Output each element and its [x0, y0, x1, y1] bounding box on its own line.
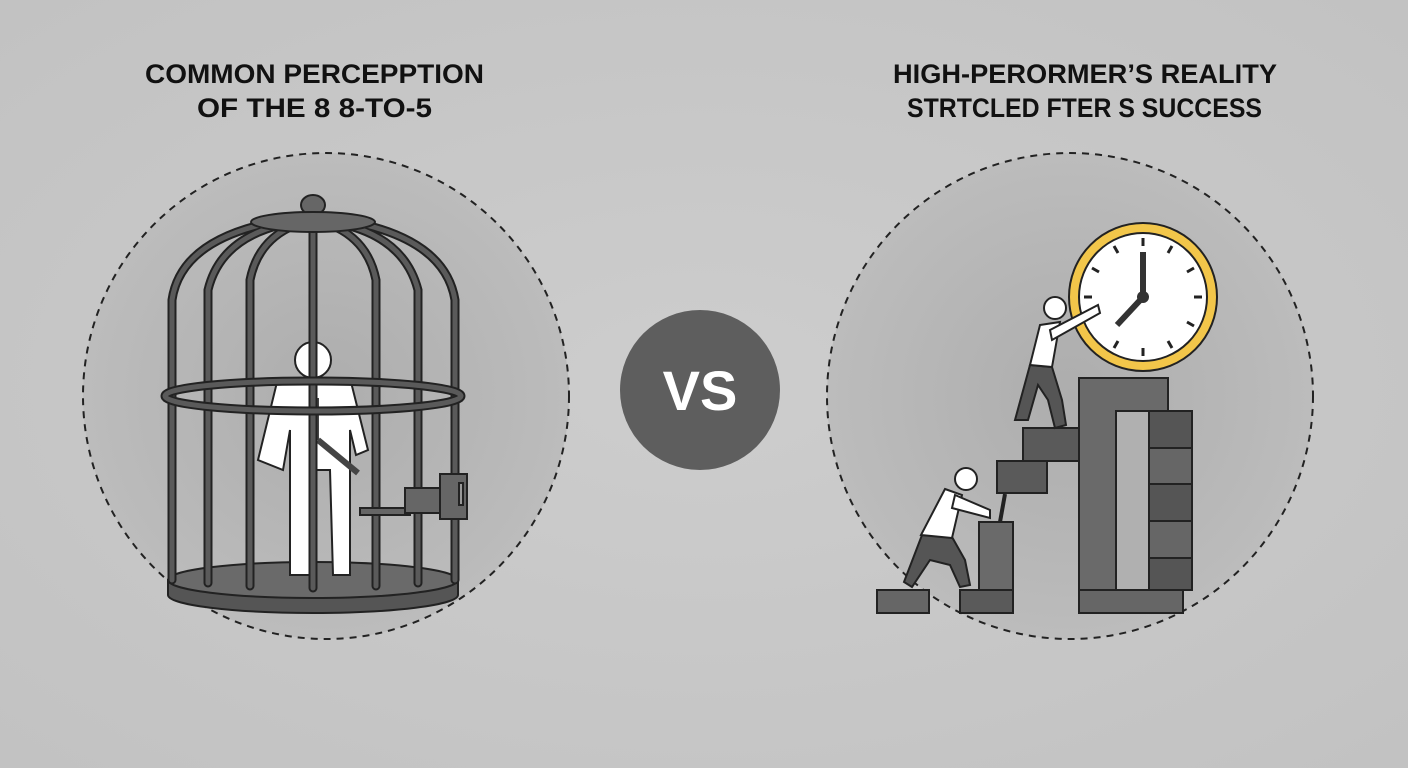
icon: cage with person — [165, 195, 467, 613]
lock — [360, 474, 467, 519]
title: right — [893, 59, 1277, 123]
title: left: COMMON PERCEPPTION — [145, 59, 484, 89]
icon: blocks and stairs — [877, 378, 1192, 613]
VS badge — [620, 310, 780, 470]
figure: lower person climbing — [904, 468, 990, 587]
top — [251, 195, 375, 232]
ring — [165, 381, 461, 411]
title: right: STRTCLED FTER S SUCCESS — [907, 93, 1262, 123]
panel: right circle — [827, 153, 1313, 639]
bars — [172, 225, 455, 588]
person — [258, 342, 368, 575]
figure: upper person pushing clock — [1015, 297, 1100, 428]
title: left — [145, 59, 484, 123]
panel: left circle — [83, 153, 569, 639]
base — [168, 562, 458, 613]
title: left: OF THE 8 8-TO-5 — [197, 93, 432, 123]
icon: clock — [1069, 223, 1217, 371]
title: right: HIGH-PERORMER’S REALITY — [893, 59, 1277, 89]
VS badge: VS — [663, 359, 737, 422]
